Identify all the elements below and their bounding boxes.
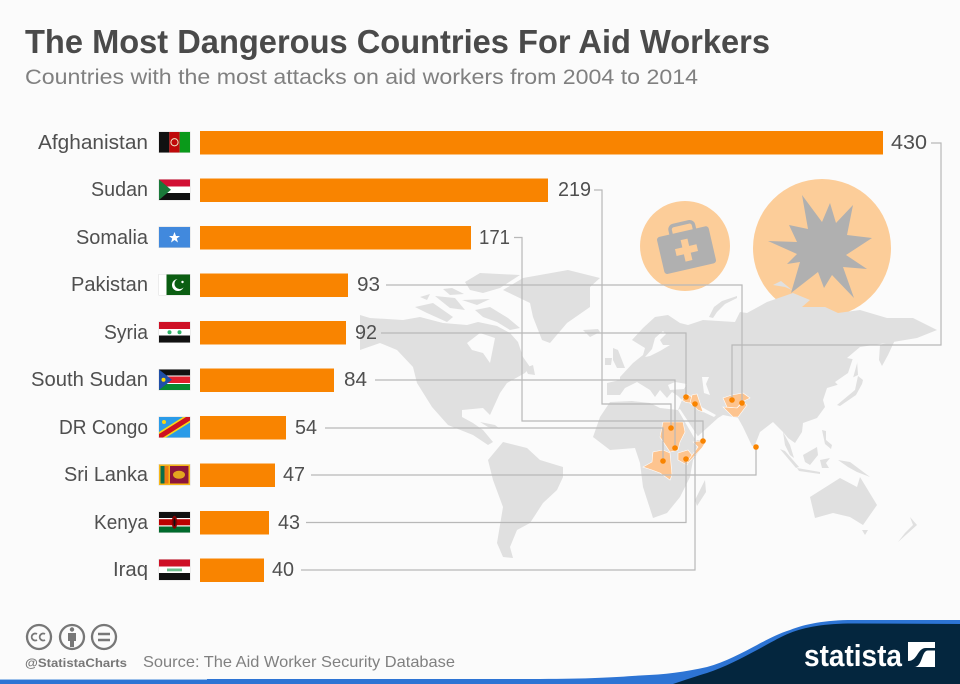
leader: South Sudan <box>375 380 675 447</box>
value labels: 54 <box>295 417 317 439</box>
map: New Guinea <box>838 460 870 477</box>
map: Arctic archipelago <box>443 288 464 295</box>
map: Borneo <box>803 447 818 465</box>
country: DR Congo <box>643 450 672 480</box>
map: Caspian Sea <box>702 377 710 395</box>
country labels: Afghanistan <box>38 132 148 154</box>
country: Sudan and South Sudan <box>660 422 685 452</box>
leader: Sri Lanka <box>311 447 756 475</box>
country labels <box>31 132 149 581</box>
leader: Afghanistan <box>732 143 941 400</box>
flag: Syria <box>158 322 190 343</box>
world map <box>360 270 937 558</box>
leader: Kenya <box>306 459 686 522</box>
map: Baltic Sea <box>645 331 670 357</box>
leader: Syria <box>381 333 686 397</box>
map: Sea of Japan <box>835 358 858 385</box>
map: Baffin Island <box>475 307 520 330</box>
map: Newfoundland <box>525 365 535 375</box>
country labels: Somalia <box>76 227 149 249</box>
country labels: Sudan <box>91 179 148 201</box>
map: Sulawesi <box>820 458 830 468</box>
value labels: 430 <box>891 132 927 154</box>
map: Cuba <box>480 422 500 429</box>
country: Kenya <box>678 450 692 465</box>
flag: Sudan <box>158 179 190 200</box>
map: Britain <box>613 348 625 368</box>
map: Ellesmere Island <box>465 273 520 293</box>
flag: Somalia <box>158 226 190 248</box>
value labels: 171 <box>479 227 510 249</box>
bar chart <box>200 131 883 582</box>
map: Africa <box>593 401 707 518</box>
handle: @StatistaCharts <box>25 656 127 670</box>
map: Novaya Zemlya <box>709 296 737 318</box>
map: Java <box>797 468 820 474</box>
map: Banks Island <box>420 294 430 300</box>
source: Source: The Aid Worker Security Database <box>143 654 455 671</box>
map: New Zealand <box>898 517 917 542</box>
country labels: Iraq <box>113 559 148 581</box>
map: Sumatra <box>780 449 799 468</box>
map: Ireland <box>605 358 612 365</box>
title: The Most Dangerous Countries For Aid Workers <box>25 23 770 60</box>
map: Persian Gulf <box>697 405 716 417</box>
map: Hudson Bay <box>467 333 495 363</box>
country: Afghanistan <box>723 393 750 408</box>
country labels: Pakistan <box>71 274 148 296</box>
map: Red Sea <box>678 409 699 441</box>
map: Malay Peninsula <box>783 432 794 458</box>
navy wave <box>673 624 960 684</box>
flag: South Sudan <box>158 369 190 390</box>
map: South America <box>488 442 563 558</box>
map: North America <box>360 315 530 445</box>
leader: Somalia <box>514 238 703 441</box>
country labels: South Sudan <box>31 369 148 391</box>
country labels: DR Congo <box>59 417 148 439</box>
map: Australia <box>810 477 877 525</box>
flag: Iraq <box>158 559 190 580</box>
light band edge <box>0 679 207 680</box>
icon: explosion in circle <box>753 179 891 317</box>
leader: Pakistan <box>386 285 742 403</box>
leader lines <box>301 143 941 570</box>
flag: DR Congo <box>158 416 190 438</box>
country: Pakistan <box>723 402 747 417</box>
value labels: 40 <box>272 559 294 581</box>
location dots <box>660 394 759 464</box>
blue wave and base band <box>0 620 960 684</box>
flag: Pakistan <box>158 274 190 296</box>
country: Iraq <box>690 394 703 412</box>
map: Madagascar <box>695 480 706 506</box>
value labels: 47 <box>283 464 305 486</box>
country: Somalia <box>687 440 707 463</box>
map: Eurasia <box>607 293 937 446</box>
highlighted countries <box>643 393 750 480</box>
map: Sakhalin <box>879 340 895 366</box>
flag: Sri Lanka <box>158 464 190 486</box>
map: Japan <box>837 376 863 406</box>
value labels: 219 <box>558 179 591 201</box>
country labels: Sri Lanka <box>64 464 149 486</box>
leader: Sudan <box>594 190 671 428</box>
Creative Commons icons <box>27 625 116 649</box>
value labels: 93 <box>357 274 380 296</box>
map: Greenland <box>503 270 600 343</box>
footer swoosh <box>0 620 960 684</box>
map: Iceland <box>583 329 600 337</box>
flag: Kenya <box>158 512 190 533</box>
value labels: 92 <box>355 322 377 344</box>
leader: DR Congo <box>325 428 663 461</box>
country labels: Syria <box>104 322 149 344</box>
value labels: 43 <box>278 512 300 534</box>
flag: Afghanistan <box>158 132 190 153</box>
map: Victoria Island <box>415 303 453 322</box>
value labels: 84 <box>344 369 367 391</box>
statista logo: statista <box>804 638 903 673</box>
value labels <box>272 132 927 581</box>
icon: medical case in circle <box>640 201 730 291</box>
country labels: Kenya <box>94 512 149 534</box>
leader: Iraq <box>301 404 695 570</box>
subtitle: Countries with the most attacks on aid workers from 2004 to 2014 <box>25 65 698 89</box>
map: Svalbard <box>773 281 792 290</box>
map: Tasmania <box>862 530 868 535</box>
map: Black Sea <box>668 382 687 390</box>
country: Syria <box>682 394 692 403</box>
map: Philippines <box>822 430 832 449</box>
